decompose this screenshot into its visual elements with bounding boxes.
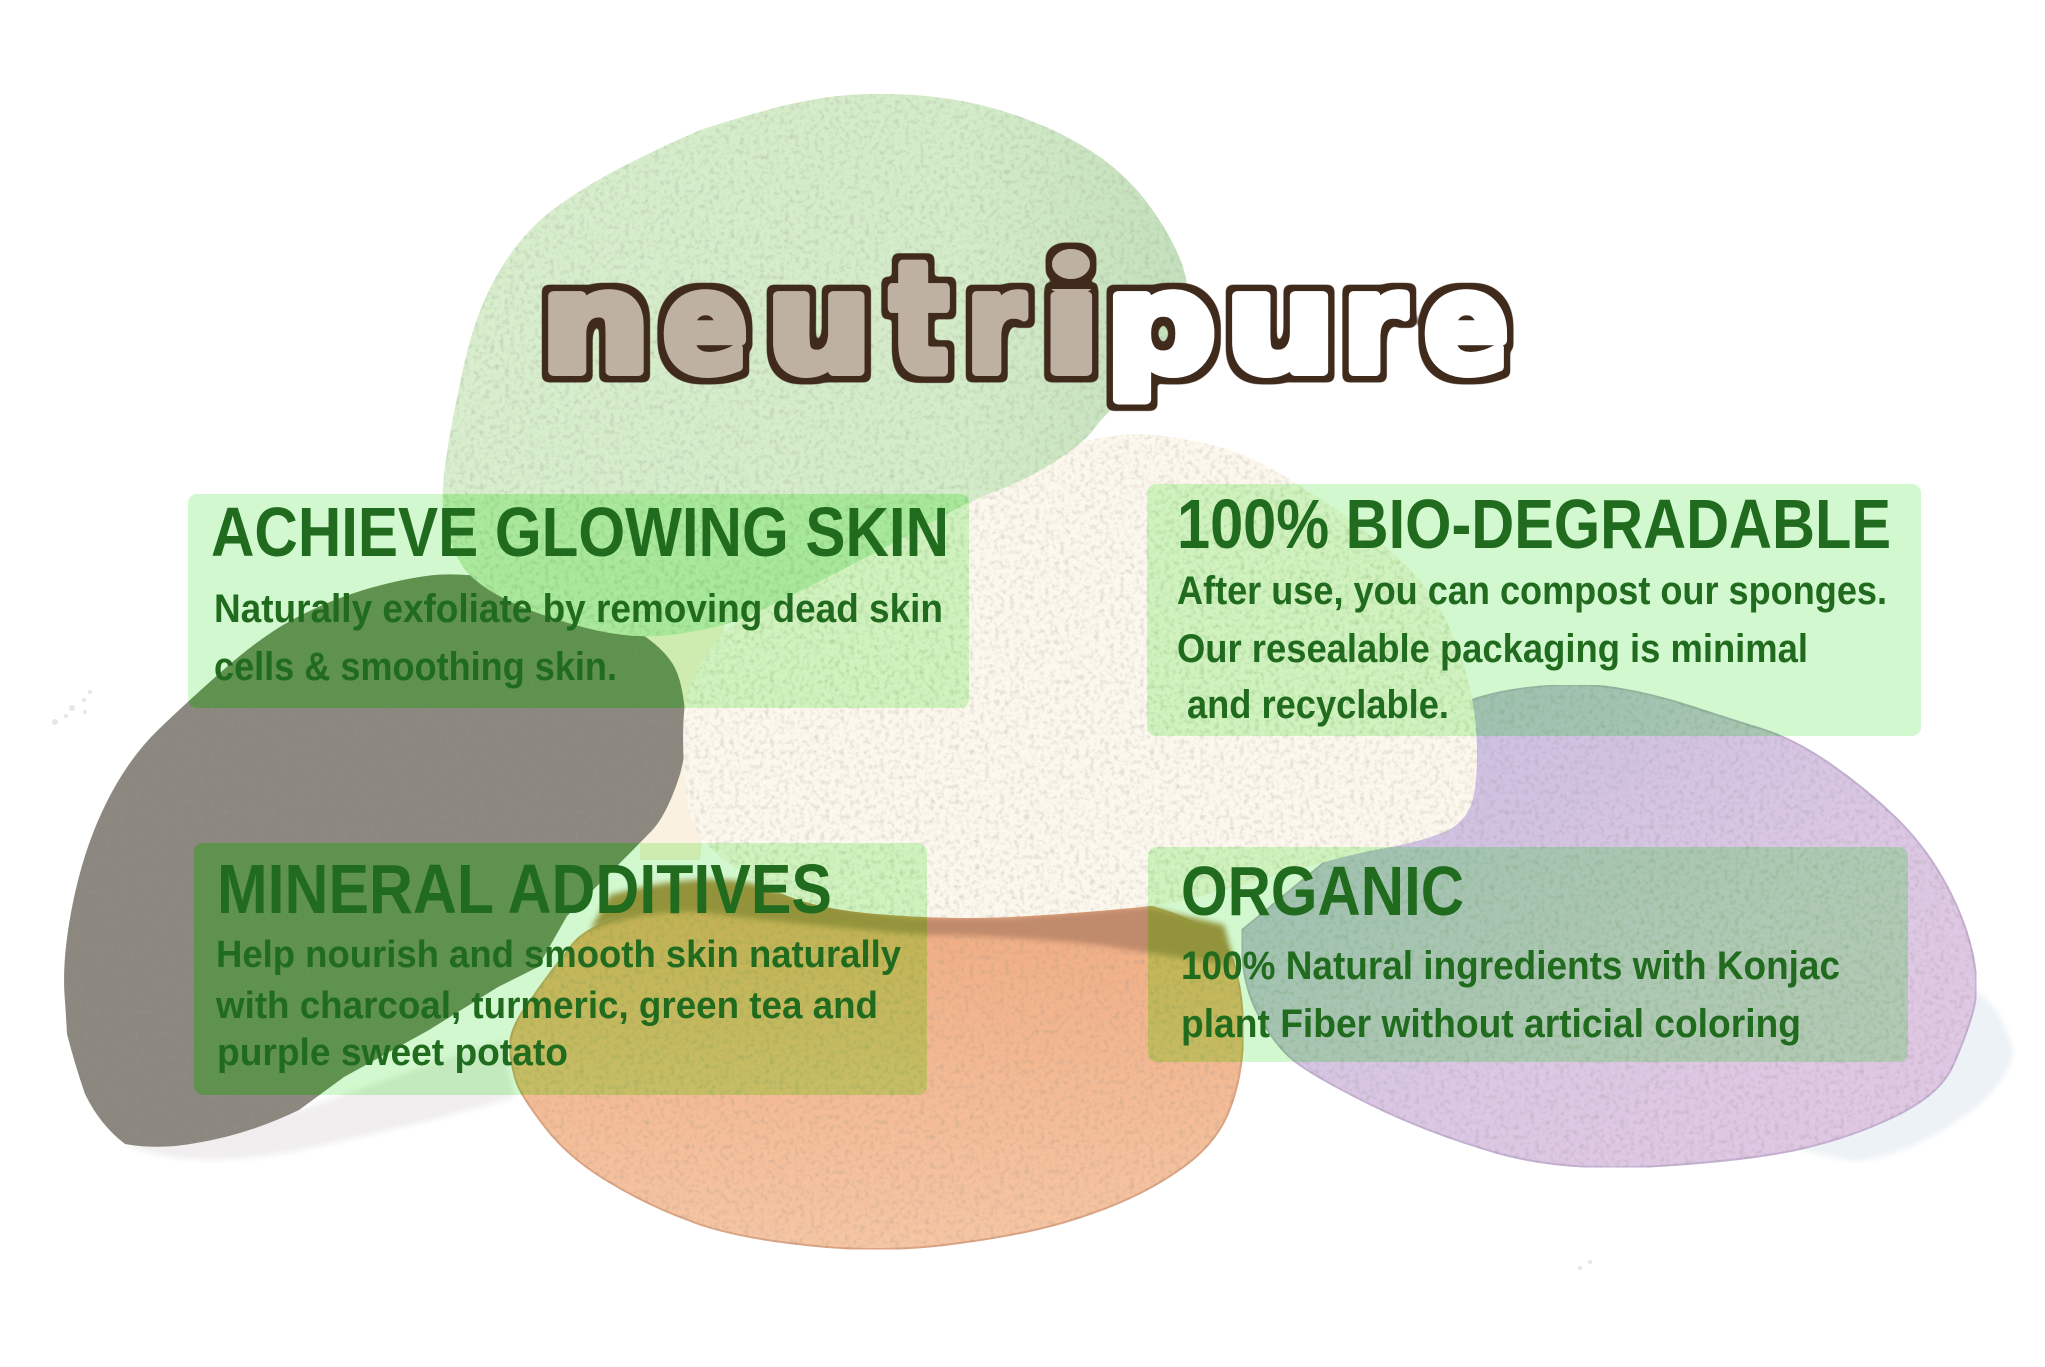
body text: Help nourish and smooth skin naturally (216, 934, 901, 976)
panel: achieve glowing skin (188, 493, 969, 708)
panel background (1147, 484, 1921, 736)
heading: ACHIEVE GLOWING SKIN (211, 493, 949, 571)
logo: neutripure (541, 231, 1508, 407)
body text: 100% Natural ingredients with Konjac (1181, 944, 1840, 988)
body text: with charcoal, turmeric, green tea and (215, 985, 878, 1027)
panel: mineral additives (194, 843, 927, 1095)
panel: 100% bio-degradable (1147, 484, 1921, 736)
logo: neutripure: p (1106, 245, 1216, 404)
shadow under purple sponge (1800, 985, 2013, 1162)
body text: cells & smoothing skin. (214, 645, 617, 689)
logo: neutripure: e (663, 245, 748, 404)
shadow under gray sponge (125, 1040, 515, 1160)
sponge: cream (683, 434, 1477, 918)
logo: neutripure: i (1043, 245, 1100, 404)
logo: neutripure: r (1343, 245, 1406, 404)
logo: neutripure: t (891, 231, 948, 407)
body text: plant Fiber without articial coloring (1181, 1002, 1801, 1046)
heading: 100% BIO-DEGRADABLE (1177, 485, 1891, 563)
body text (1181, 944, 1840, 1046)
panel: organic (1148, 847, 1908, 1062)
sponge: gray (64, 574, 686, 1147)
panel background (1148, 847, 1908, 1062)
body text: Our resealable packaging is minimal (1177, 627, 1808, 671)
body text: After use, you can compost our sponges. (1177, 569, 1887, 613)
sponge: green (443, 94, 1187, 636)
logo: neutripure: e (1424, 245, 1508, 404)
heading: ORGANIC (1181, 852, 1464, 930)
panel background (194, 843, 927, 1095)
logo: neutripure: u (1226, 245, 1335, 404)
tan gap behind sponges (640, 622, 725, 860)
heading: MINERAL ADDITIVES (217, 850, 832, 928)
body text: and recyclable. (1187, 683, 1449, 727)
body text (215, 934, 901, 1074)
logo: neutripure: r (967, 245, 1025, 404)
specks (52, 690, 1592, 1270)
logo: neutripure: n (541, 245, 650, 404)
sponge: orange (510, 890, 1243, 1249)
shadow band under cream sponge (590, 879, 1235, 965)
sponge: purple (1242, 685, 1976, 1167)
body text (214, 587, 943, 689)
body text: Naturally exfoliate by removing dead skin (214, 587, 943, 631)
body text (1177, 569, 1887, 727)
panel background (188, 494, 969, 708)
logo: neutripure: u (767, 245, 872, 404)
body text: purple sweet potato (217, 1032, 568, 1074)
